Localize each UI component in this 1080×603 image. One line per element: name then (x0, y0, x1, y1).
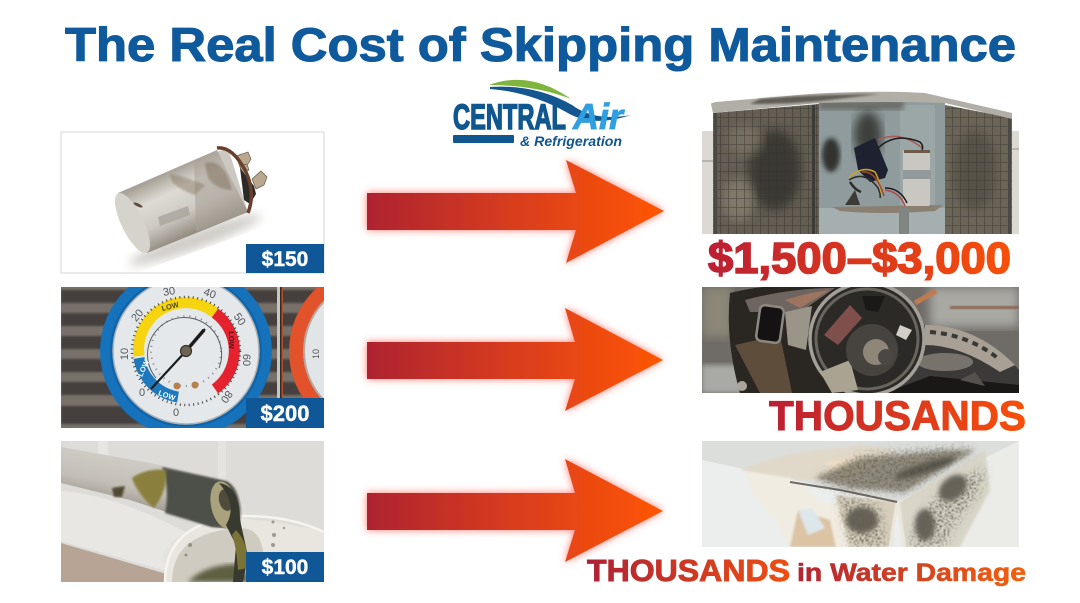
panel: burnt AC unit photo (702, 92, 1019, 234)
centre service panel (819, 100, 945, 234)
cost label THOUSANDS in Water Damage (587, 553, 1026, 588)
burnt capacitor and wiring (849, 136, 931, 206)
logo tagline: & Refrigeration (520, 133, 622, 149)
gauge LOW labels: LOW (161, 300, 181, 313)
arrow: capacitor to AC failure (367, 160, 664, 263)
arrow: gauge to compressor failure (367, 308, 663, 411)
panel: mold and water damage photo (702, 441, 1019, 547)
bucket (164, 514, 324, 582)
gauge numbers: 50 (231, 311, 248, 328)
white conduit (61, 491, 186, 570)
gauge needle (151, 329, 205, 389)
main gauge (100, 287, 272, 428)
logo bar (453, 135, 514, 143)
drain pipe (61, 447, 248, 582)
capacitor rim (217, 148, 251, 213)
gauge numbers: 0 (139, 387, 145, 399)
price tag $200: $200 (261, 401, 309, 426)
water stains and peeling paint (740, 445, 990, 547)
compressor rotor (810, 283, 924, 395)
top lid (711, 92, 1012, 119)
gauge numbers (119, 285, 252, 419)
panel: clogged drain pipe photo (61, 441, 324, 582)
dark mold blotches (846, 453, 972, 541)
gauge numbers: 20 (129, 307, 146, 324)
gauge colour bands (139, 303, 234, 397)
price tag $200 (246, 398, 324, 428)
cost label THOUSANDS: THOUSANDS (769, 392, 1026, 439)
price tag $150: $150 (262, 248, 308, 271)
logo wordmark CENTRAL: CENTRAL (453, 98, 566, 137)
right wall (897, 441, 1019, 547)
price tag $100: $100 (262, 556, 308, 579)
gauge screws (174, 382, 198, 390)
gauge numbers: 80 (218, 388, 235, 405)
gauge numbers: 0 (173, 407, 179, 419)
left coil grille (713, 104, 819, 234)
price tag $150 (246, 244, 324, 273)
copper tube (915, 291, 936, 303)
ceiling (702, 441, 1019, 502)
capacitor body (118, 150, 248, 253)
arrow: drain to water damage (367, 459, 663, 562)
compressor housing (728, 287, 846, 393)
logo wordmark Air: Air (572, 96, 625, 137)
speckled black mold (815, 447, 985, 547)
cost label $1,500–$3,000: $1,500–$3,000 (708, 234, 1011, 283)
panel: refrigerant gauge photo (61, 287, 324, 428)
second gauge (289, 287, 324, 398)
second gauge: 10 (311, 349, 321, 359)
panel: destroyed compressor photo (702, 283, 1019, 395)
gauge numbers: 60 (240, 354, 252, 366)
logo: Central Air & Refrigeration (453, 80, 631, 149)
gauge LOW labels (136, 300, 236, 403)
vertical lines (277, 287, 283, 398)
panel: worn capacitor photo (61, 132, 324, 273)
floor (61, 543, 170, 582)
THOUSANDS: THOUSANDS (587, 553, 790, 588)
price tag $100 (246, 552, 324, 582)
gauge numbers: 30 (162, 285, 176, 299)
capacitor terminals (236, 152, 267, 189)
gauge LOW labels: LOW (227, 331, 236, 350)
gauge LOW labels: LOW (157, 388, 177, 403)
ceiling mold shadow (815, 450, 975, 492)
gauge LOW labels: LOW (136, 358, 152, 378)
in Water Damage: in Water Damage (797, 559, 1026, 587)
title: The Real Cost of Skipping Maintenance (65, 18, 1016, 71)
gauge numbers: 40 (202, 286, 217, 302)
right coil grille (945, 105, 1012, 234)
logo swoosh (489, 80, 631, 121)
condenser fin stripes (61, 290, 324, 424)
gauge numbers: 10 (119, 348, 131, 360)
scrap metal pile (885, 325, 1019, 393)
